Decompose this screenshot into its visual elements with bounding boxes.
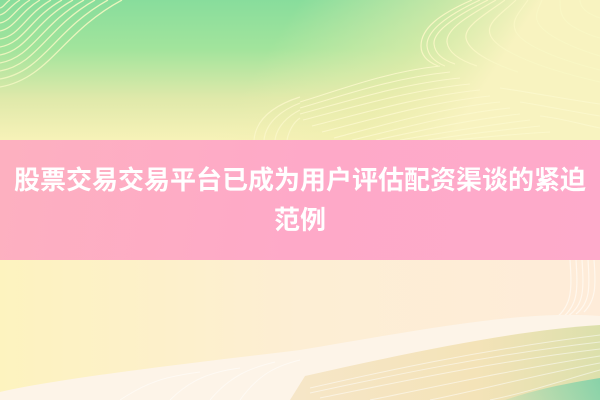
title band (0, 140, 600, 260)
central hill lines (300, 66, 600, 140)
top left wave lines (0, 0, 122, 87)
title (14, 165, 586, 235)
floor stripes (120, 335, 600, 400)
right arcs below band (556, 260, 595, 318)
title: 股票交易交易平台已成为用户评估配资渠谈的紧迫 (14, 165, 586, 195)
top right hill lines (421, 0, 600, 82)
top gradient panel (0, 0, 600, 140)
bottom floor (0, 315, 600, 400)
title: 范例 (274, 205, 326, 235)
bottom gradient panel (0, 260, 600, 400)
small arc lines near band (254, 97, 300, 140)
